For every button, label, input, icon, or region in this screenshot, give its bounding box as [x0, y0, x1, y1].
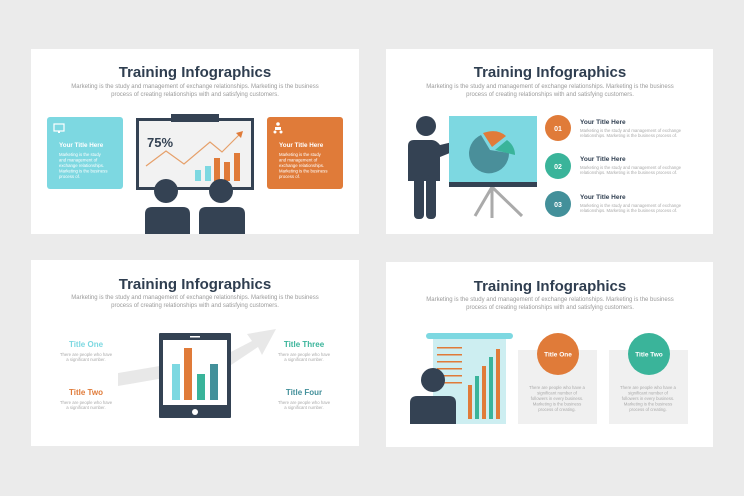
label: title one: Title One — [69, 340, 104, 349]
subtitle 2: Marketing is the study and management of exchange relationships. Marketing is the business — [426, 84, 674, 90]
card: title two: Marketing is the business — [624, 402, 672, 406]
card: title one: followers in every business. — [531, 396, 583, 401]
subtitle 1: Marketing is the study and management of exchange relationships. Marketing is the business — [71, 84, 319, 90]
list item 03: Your Title Here — [580, 194, 626, 201]
cyan card: Your Title Here — [59, 142, 104, 149]
cyan card: and management of — [59, 158, 98, 162]
cyan card: Marketing is the study — [59, 152, 102, 157]
label: title three: a significant number. — [284, 357, 324, 362]
list item 03 — [545, 191, 682, 217]
panel: slide 2 — [386, 49, 713, 234]
subtitle 3: Marketing is the study and management of exchange relationships. Marketing is the business — [71, 295, 319, 301]
easel with pie chart — [449, 116, 537, 218]
whiteboard chart: 75% — [147, 135, 173, 150]
board with bars — [426, 333, 513, 424]
card: title two: followers in every business. — [622, 396, 674, 401]
title 3: Training Infographics — [119, 276, 271, 293]
tablet chart — [159, 333, 231, 418]
arrow — [118, 329, 276, 386]
orange card: Marketing is the business — [279, 168, 327, 174]
cyan card: exchange relationships. — [59, 163, 104, 168]
list item 01 — [545, 115, 682, 141]
cyan card — [47, 117, 123, 189]
audience figures — [145, 179, 245, 234]
card: title one — [518, 333, 597, 424]
subtitle 3 — [71, 295, 319, 309]
subtitle 4 — [426, 297, 674, 311]
presenter figure — [408, 116, 467, 219]
list item 01: relationships. Marketing is the business process of. — [580, 133, 677, 138]
orange card: and management of — [279, 158, 318, 162]
card: title one: process of creating. — [538, 407, 576, 412]
title 2: Training Infographics — [474, 64, 626, 81]
list item 02: Marketing is the study and management of exchange — [580, 165, 682, 170]
whiteboard chart — [138, 114, 252, 188]
list item 03: relationships. Marketing is the business process of. — [580, 208, 677, 213]
orange card — [267, 117, 343, 189]
orange card: exchange relationships. — [279, 163, 324, 168]
list item 02 — [545, 153, 682, 179]
card: title two: Title Two — [635, 352, 663, 358]
card: title two: process of creating. — [629, 407, 667, 412]
label: title four: There are people who have — [278, 400, 331, 405]
list item 01: Marketing is the study and management of exchange — [580, 128, 682, 133]
title 4: Training Infographics — [474, 278, 626, 295]
list item 02: Your Title Here — [580, 156, 626, 163]
subtitle 4: Marketing is the study and management of exchange relationships. Marketing is the business — [426, 297, 674, 303]
title 1: Training Infographics — [119, 64, 271, 81]
label: title one: There are people who have — [60, 352, 113, 357]
list item 02: relationships. Marketing is the business process of. — [580, 170, 677, 175]
subtitle 1 — [71, 84, 319, 98]
list item 01: Your Title Here — [580, 119, 626, 126]
subtitle 2: process of creating relationships with and satisfying customers. — [466, 92, 634, 98]
label: title three: There are people who have — [278, 352, 331, 357]
label: title four: a significant number. — [284, 405, 324, 410]
label: title two: Title Two — [69, 388, 103, 397]
label: title three: Title Three — [284, 340, 325, 349]
person — [410, 368, 456, 424]
card: title one: significant number of — [537, 390, 578, 396]
orange card: process of. — [279, 174, 300, 179]
list item 03: 03 — [554, 202, 562, 209]
label: title one: a significant number. — [66, 357, 106, 362]
panel: slide 3 — [31, 260, 359, 446]
card: title one: Marketing is the business — [533, 402, 581, 406]
label: title two — [60, 388, 113, 410]
label: title four: Title Four — [286, 388, 322, 397]
orange card: Marketing is the study — [279, 152, 322, 157]
label: title two: a significant number. — [66, 405, 106, 410]
label: title one — [60, 340, 113, 362]
label: title three — [278, 340, 331, 362]
card: title one: Title One — [544, 352, 572, 358]
panel: slide 1 — [31, 49, 359, 234]
card: title one: There are people who have a — [529, 385, 586, 390]
list item 03: Marketing is the study and management of exchange — [580, 203, 682, 208]
label: title two: There are people who have — [60, 400, 113, 405]
list item 01: 01 — [554, 126, 562, 133]
card: title two: There are people who have a — [620, 385, 677, 390]
subtitle 1: process of creating relationships with and satisfying customers. — [111, 92, 279, 98]
subtitle 2 — [426, 84, 674, 98]
orange card: Your Title Here — [279, 142, 324, 149]
card: title two: significant number of — [628, 390, 669, 396]
panel: slide 4 — [386, 262, 713, 447]
list item 02: 02 — [554, 164, 562, 171]
subtitle 4: process of creating relationships with and satisfying customers. — [466, 305, 634, 311]
label: title four — [278, 388, 331, 410]
subtitle 3: process of creating relationships with and satisfying customers. — [111, 303, 279, 309]
card: title two — [609, 333, 688, 424]
cyan card: Marketing is the business — [59, 168, 107, 174]
cyan card: process of. — [59, 174, 80, 179]
